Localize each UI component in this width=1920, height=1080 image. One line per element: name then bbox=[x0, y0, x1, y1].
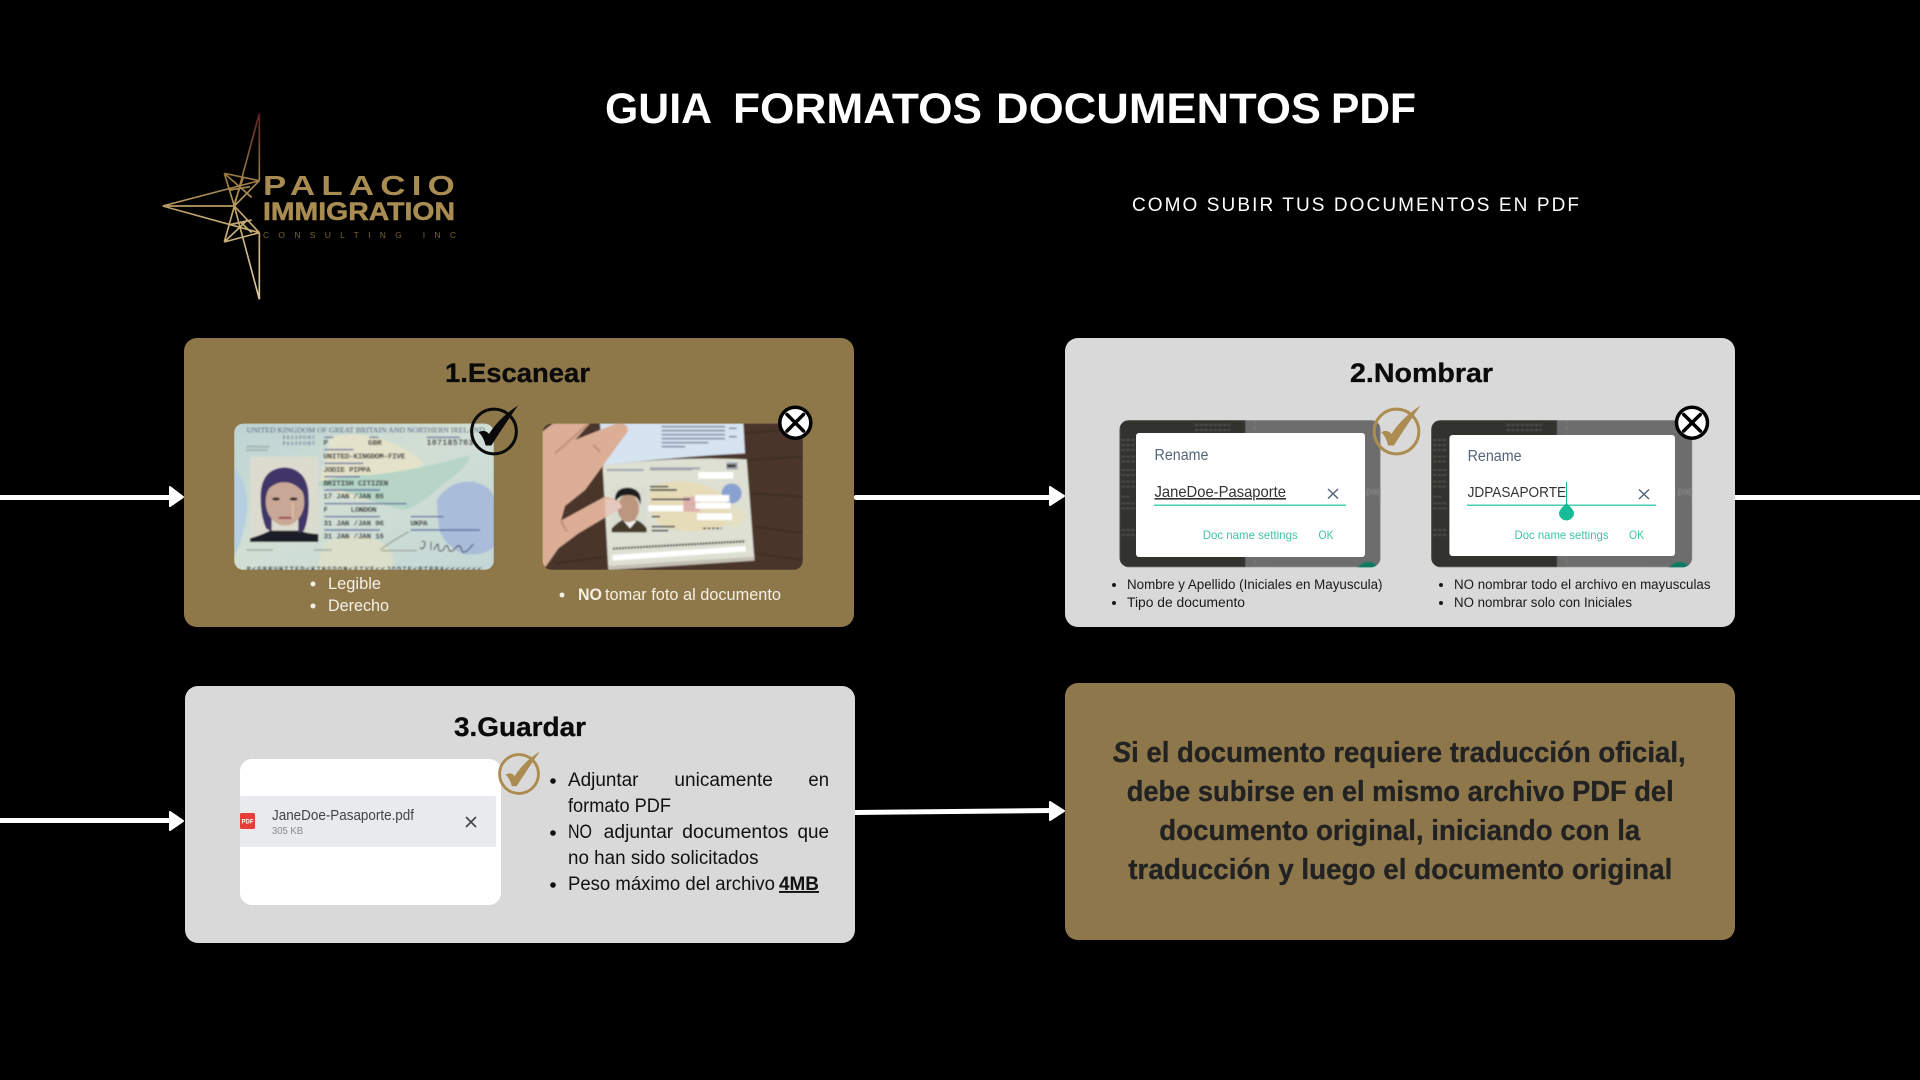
bullet list: incorrect naming: NO nombrar todo el archivo en mayusculas bbox=[1454, 577, 1711, 592]
passport scan: correct example: P bbox=[323, 440, 328, 448]
logo tagline: CONSULTING INC bbox=[263, 230, 456, 240]
arrow: step 1 to step 2 bbox=[854, 487, 1064, 505]
note text: traducción y luego el documento original bbox=[1128, 854, 1672, 886]
arrow: into step 3 bbox=[0, 812, 183, 830]
bullet list: saving rules: no han sido solicitados bbox=[568, 848, 758, 869]
heading: 2.Nombrar: 2.Nombrar bbox=[1350, 358, 1494, 388]
file card with attached PDF: 305 KB bbox=[272, 826, 303, 837]
note text: documento original, iniciando con la bbox=[1159, 815, 1641, 847]
screenshot: incorrect rename dialog: Rename bbox=[1468, 448, 1522, 465]
bullet list: correct naming: Nombre y Apellido (Iniciales en Mayuscula) bbox=[1127, 577, 1382, 592]
screenshot: correct rename dialog: OK bbox=[1318, 528, 1334, 542]
heading: 1.Escanear: 1.Escanear bbox=[445, 358, 590, 388]
panel: step 3 Guardar bbox=[185, 686, 855, 943]
bullet list: correct naming: Tipo de documento bbox=[1127, 595, 1245, 610]
bullet list: saving rules: Peso máximo del archivo bbox=[568, 874, 775, 895]
icon: PDF badge: PDF bbox=[242, 818, 254, 826]
bullet list: saving rules: formato PDF bbox=[568, 796, 671, 817]
passport scan: correct example: F bbox=[323, 507, 328, 515]
icon: gold check on file card bbox=[500, 751, 540, 793]
passport scan: correct example bbox=[234, 423, 494, 575]
screenshot: correct rename dialog: pag bbox=[1366, 486, 1383, 497]
screenshot: correct rename dialog: Doc name settings bbox=[1203, 528, 1298, 542]
bullet list: saving rules: en bbox=[808, 770, 829, 791]
bullet list: saving rules bbox=[550, 770, 829, 895]
bullet list: saving rules: adjuntar bbox=[604, 822, 674, 843]
screenshot: correct rename dialog: JaneDoe-Pasaporte bbox=[1154, 484, 1286, 501]
icon: check mark on passport scan bbox=[472, 406, 518, 454]
passport scan: correct example: PASSPORT bbox=[283, 442, 315, 447]
icon: cross on incorrect dialog bbox=[1676, 407, 1708, 438]
passport scan: correct example: JODIE PIPPA bbox=[323, 467, 371, 475]
bullet list: good scan bbox=[310, 574, 389, 615]
bullet list: bad photo: tomar foto al documento bbox=[605, 586, 781, 604]
arrow: into step 1 bbox=[0, 487, 183, 506]
passport scan: correct example: PASSPORT bbox=[283, 436, 315, 441]
logo name: PALACIO bbox=[263, 170, 461, 201]
bullet list: good scan: Derecho bbox=[328, 596, 389, 615]
icon: cross on passport photo bbox=[780, 407, 811, 438]
bullet list: correct naming bbox=[1112, 577, 1382, 610]
passport scan: correct example: LONDON bbox=[351, 507, 377, 515]
panel: step 2 Nombrar bbox=[1065, 338, 1735, 627]
bullet list: saving rules: Adjuntar bbox=[568, 770, 639, 791]
bullet list: saving rules: 4MB bbox=[779, 874, 819, 895]
title: FORMATOS bbox=[733, 85, 982, 133]
passport scan: correct example: UNITED-KINGDOM-FIVE bbox=[323, 454, 406, 462]
passport photo: incorrect example bbox=[542, 423, 803, 570]
note text bbox=[1113, 737, 1686, 886]
screenshot: incorrect rename dialog: pag bbox=[1678, 486, 1694, 497]
screenshot: incorrect rename dialog bbox=[1431, 420, 1692, 568]
bullet list: saving rules: NO bbox=[568, 822, 592, 843]
arrow: step 3 to note bbox=[855, 802, 1064, 820]
bullet list: incorrect naming: NO nombrar solo con Iniciales bbox=[1454, 595, 1632, 610]
passport scan: correct example: 31 JAN /JAN 16 bbox=[323, 534, 384, 542]
passport scan: correct example: GBR bbox=[368, 440, 382, 448]
passport scan: correct example: UNITED KINGDOM OF GREAT BRITAIN AND NORTHERN IRELAND bbox=[247, 426, 485, 434]
screenshot: incorrect rename dialog: Doc name settings bbox=[1514, 528, 1608, 542]
bullet list: saving rules: unicamente bbox=[674, 770, 773, 791]
logo star mark bbox=[163, 113, 259, 299]
title: PDF bbox=[1331, 85, 1416, 133]
bullet list: saving rules: documentos bbox=[682, 822, 788, 843]
logo: Palacio Immigration Consulting Inc bbox=[163, 113, 461, 299]
screenshot: incorrect rename dialog: JDPASAPORTE bbox=[1468, 484, 1566, 501]
passport scan: correct example: 107185703 bbox=[427, 439, 474, 448]
bullet list: incorrect naming bbox=[1439, 577, 1711, 610]
file card with attached PDF: JaneDoe-Pasaporte.pdf bbox=[272, 808, 415, 824]
title bbox=[605, 85, 1416, 133]
passport scan: correct example: 17 JAN /JAN 85 bbox=[323, 494, 384, 502]
screenshot: correct rename dialog: Rename bbox=[1154, 447, 1208, 464]
logo name second line: IMMIGRATION bbox=[263, 198, 455, 226]
bullet list: saving rules: que bbox=[798, 822, 829, 843]
passport scan: correct example: P<GBRUNITED<KINGDOM<FIVE<<JODIE<PIPPA<<<<<<< bbox=[247, 567, 482, 575]
note text: debe subirse en el mismo archivo PDF del bbox=[1127, 776, 1674, 808]
panel: translation note bbox=[1065, 683, 1735, 940]
file card with attached PDF bbox=[240, 759, 501, 905]
icon: PDF badge bbox=[240, 813, 255, 829]
subtitle: COMO SUBIR TUS DOCUMENTOS EN PDF bbox=[1132, 195, 1579, 216]
heading: 3.Guardar: 3.Guardar bbox=[454, 712, 586, 742]
title: GUIA bbox=[605, 85, 712, 133]
arrow: out of step 2 bbox=[1735, 495, 1920, 500]
screenshot: correct rename dialog bbox=[1119, 420, 1381, 568]
icon: gold check on correct dialog bbox=[1374, 406, 1420, 454]
note text: Si el documento requiere traducción oficial, bbox=[1113, 737, 1686, 769]
bullet list: good scan: Legible bbox=[328, 574, 381, 593]
passport scan: correct example: UKPA bbox=[410, 520, 428, 528]
bullet list: bad photo: NO bbox=[578, 586, 602, 604]
passport scan: correct example: 31 JAN /JAN 06 bbox=[323, 520, 384, 528]
passport scan: correct example: BRITISH CITIZEN bbox=[323, 480, 389, 488]
title: DOCUMENTOS bbox=[996, 85, 1321, 133]
panel: step 1 Escanear bbox=[184, 338, 854, 627]
screenshot: incorrect rename dialog: OK bbox=[1629, 528, 1644, 542]
